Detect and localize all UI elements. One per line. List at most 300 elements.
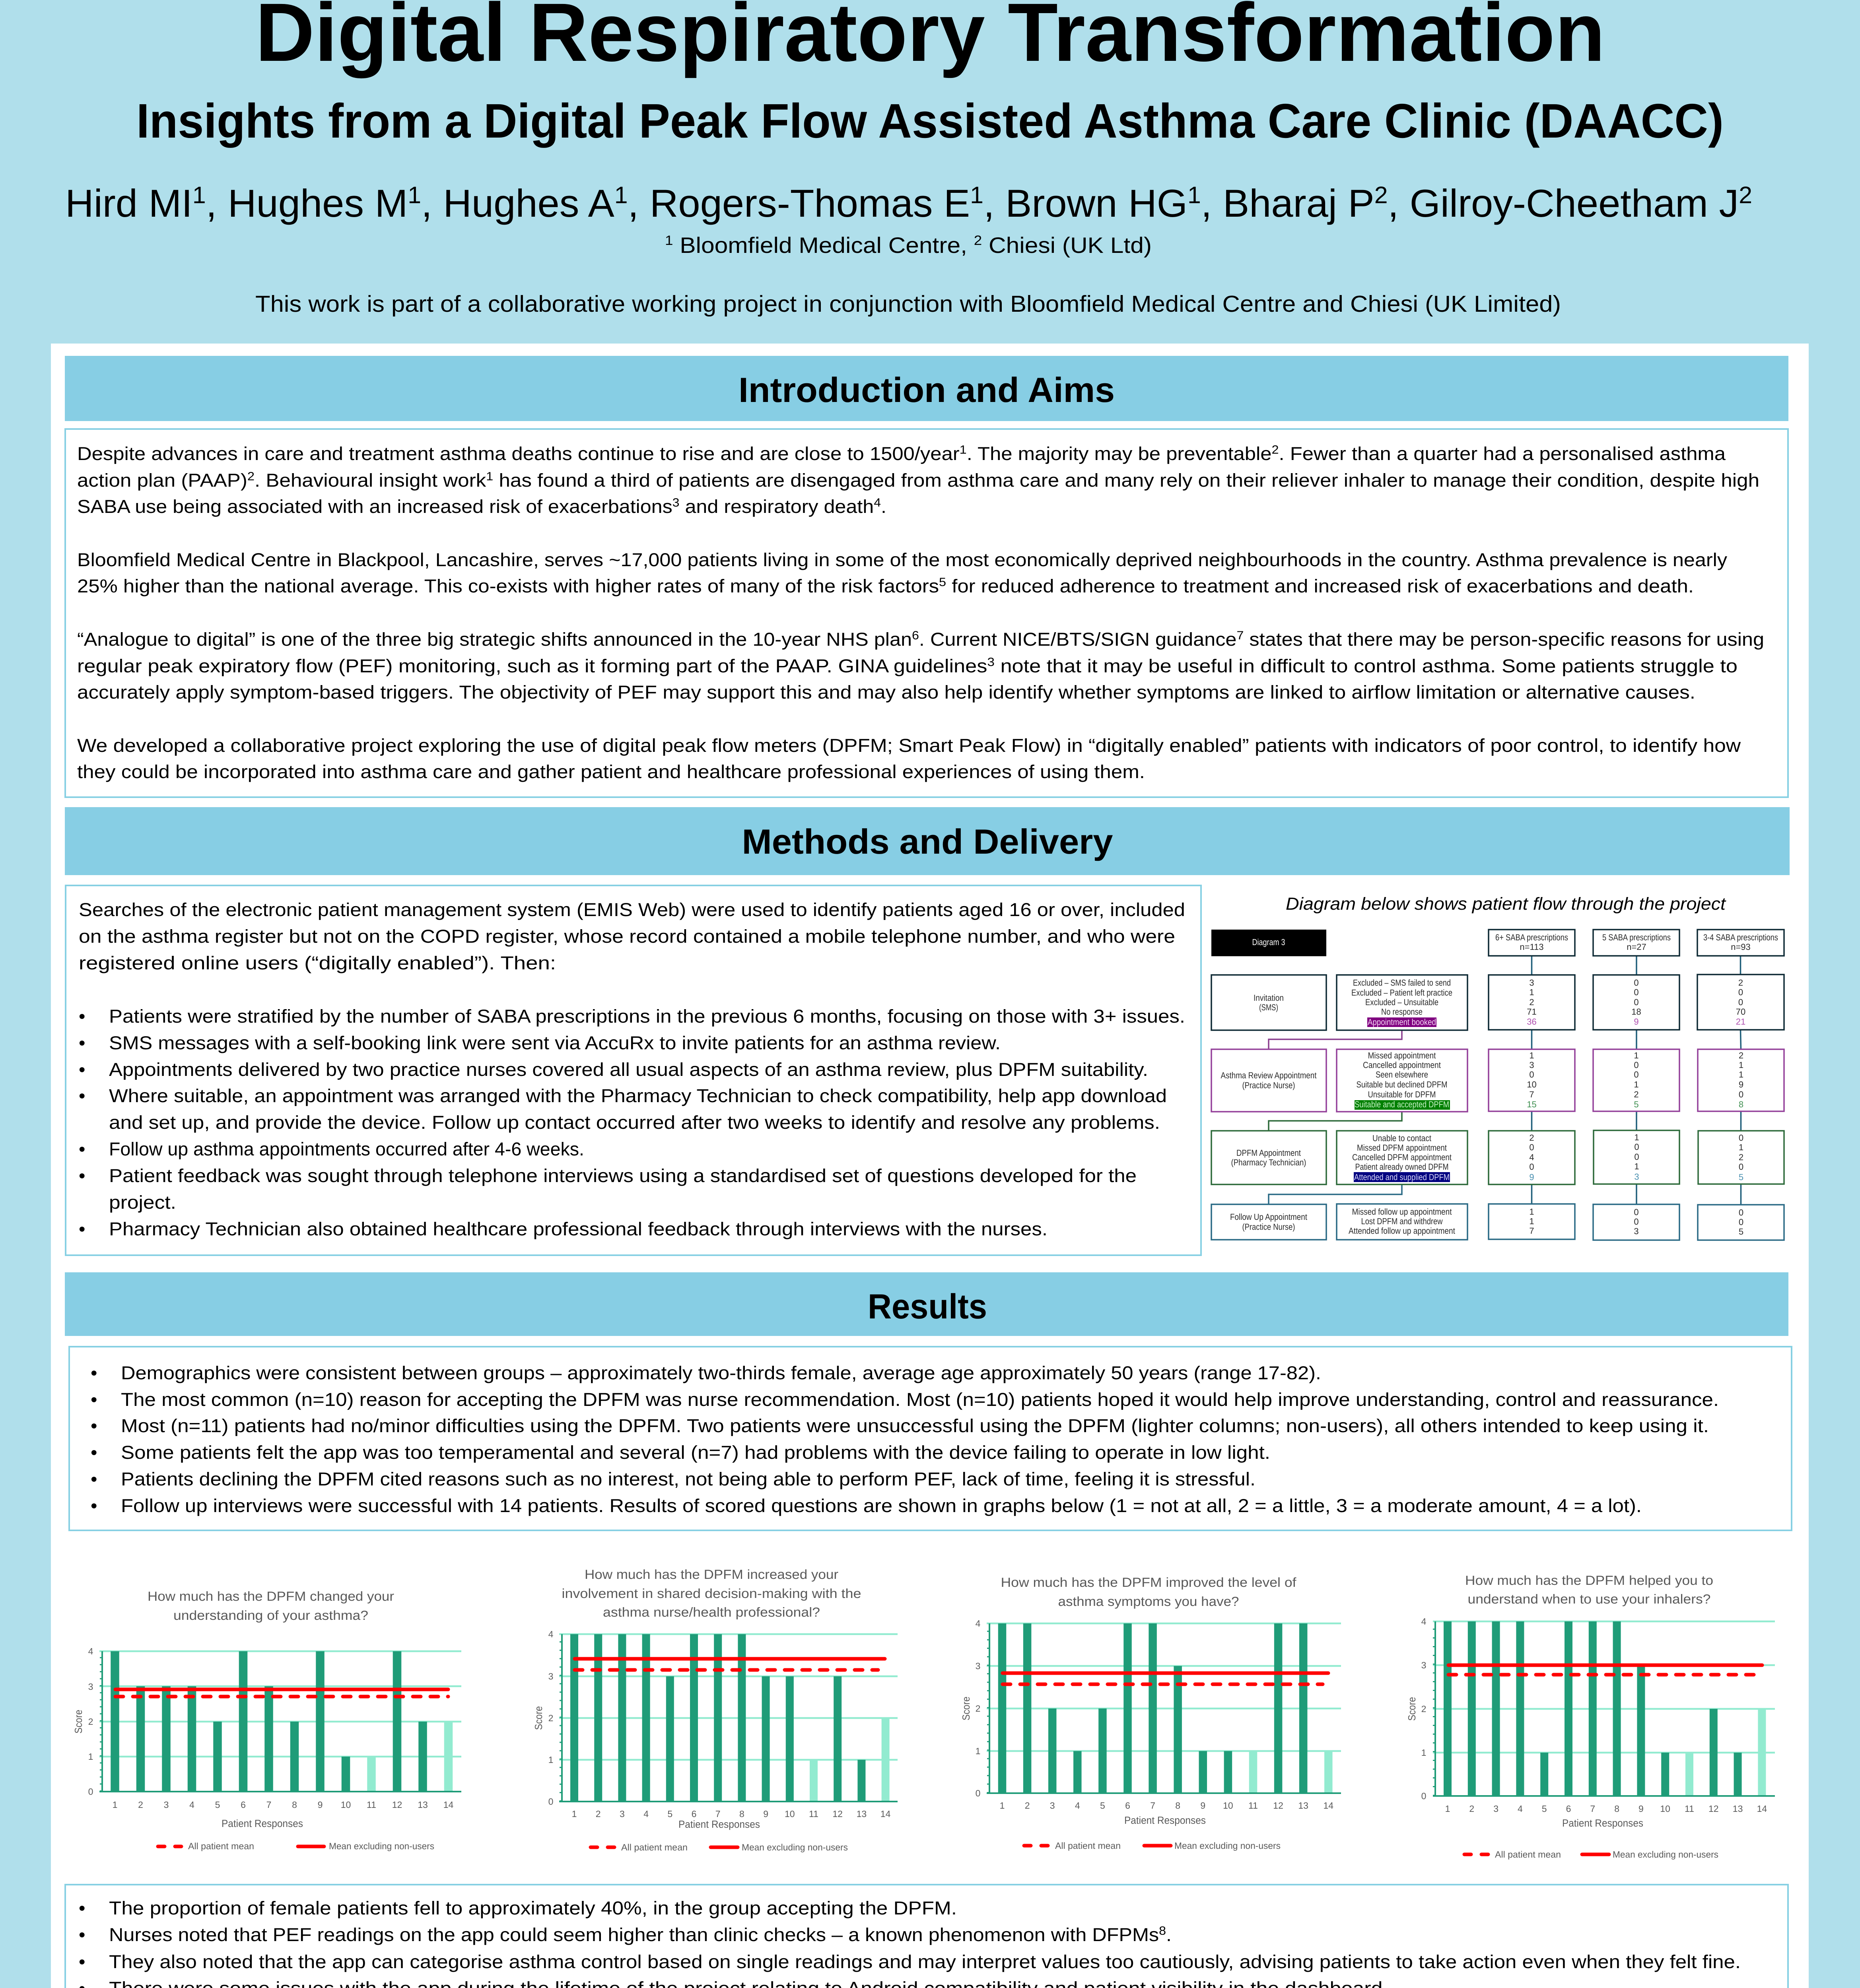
chart 2 axis labels: 3: [548, 1671, 553, 1681]
text box: methods: Pharmacy Technician also obtained healthcare professional feedback through interviews with the nurses.: [109, 1218, 1048, 1239]
text box: introduction: 25% higher than the national average. This co-exists with higher rates of many of the risk factors: [77, 575, 874, 596]
chart 1 axis labels: 14: [443, 1800, 453, 1810]
chart 4 axis labels: 14: [1757, 1804, 1767, 1814]
numbers: 6+ SABA column: 9: [1529, 1172, 1534, 1182]
numbers: 3-4 SABA column: 0: [1739, 1217, 1743, 1227]
panel: results: [65, 1272, 1792, 1988]
diagram label box: [1211, 930, 1326, 956]
text box: results: [69, 1347, 1792, 1530]
numbers: 5 SABA column: 1: [1634, 1161, 1639, 1171]
outcome labels: Appointment booked: [1368, 1017, 1436, 1027]
text box: methods: SMS messages with a self-booking link were sent via AccuRx to invite patients for an asthma review.: [109, 1032, 1001, 1053]
chart 3 axis labels: 9: [1200, 1800, 1205, 1811]
chart 1 axis labels: 7: [266, 1800, 271, 1810]
numbers: 5 SABA column: 0: [1634, 1060, 1639, 1070]
text box: methods: Patient feedback was sought through telephone interviews using a standardised set of questions developed for the: [109, 1165, 1137, 1186]
numbers: 6+ SABA column: [1527, 978, 1537, 1236]
text box: methods: Searches of the electronic patient management system (EMIS Web) were used to identify patients aged 16 or over, included: [79, 899, 1185, 920]
chart 1 bars: [115, 1651, 449, 1792]
affiliations: 2: [974, 233, 982, 248]
authors: , Brown HG: [983, 181, 1188, 225]
chart 1 legend: Mean excluding non-users: [329, 1841, 434, 1851]
numbers: 3-4 SABA column: 2: [1739, 1050, 1743, 1060]
outcome labels: Suitable and accepted DPFM: [1355, 1099, 1449, 1109]
chart 3 legend: All patient mean: [1055, 1840, 1121, 1851]
numbers: 5 SABA column: 0: [1634, 1207, 1639, 1217]
chart 3 axis labels: Patient Responses: [1124, 1814, 1206, 1826]
chart 4 axis labels: 7: [1590, 1804, 1595, 1814]
affiliations: Bloomfield Medical Centre,: [673, 233, 974, 258]
chart 3 legend: Mean excluding non-users: [1174, 1840, 1281, 1851]
chart 3 axis labels: 8: [1175, 1800, 1180, 1811]
chart 2 axis labels: 6: [692, 1809, 696, 1819]
numbers: 3-4 SABA column: [1736, 978, 1745, 1237]
chart 2 axis labels: Patient Responses: [678, 1818, 760, 1830]
text box: introduction: accurately apply symptom-based triggers. The objectivity of PEF may support this and may also help identify whether symptoms are linked to airflow limitation or alternative causes.: [77, 681, 1695, 703]
chart 2 axis labels: 9: [763, 1809, 768, 1819]
chart 2 axis labels: 12: [832, 1809, 843, 1819]
numbers: 3-4 SABA column: 70: [1736, 1007, 1745, 1017]
chart 4 mean lines: [1448, 1665, 1762, 1675]
row: follow up: [1211, 1204, 1784, 1240]
chart 2 title: How much has the DPFM increased your: [585, 1567, 838, 1582]
chart 4 axis labels: 8: [1614, 1804, 1619, 1814]
chart 2 axis labels: 5: [667, 1809, 672, 1819]
authors: , Bharaj P: [1201, 181, 1374, 225]
text box: results: Patients declining the DPFM cited reasons such as no interest, not being able to perform PEF, lack of time, feeling it is stressful.: [121, 1468, 1256, 1489]
heading: introduction: Introduction and Aims: [739, 370, 1115, 410]
chart 2 legend: Mean excluding non-users: [742, 1842, 848, 1852]
outcome labels: Attended follow up appointment: [1349, 1226, 1455, 1236]
chart 2 axis labels: 1: [572, 1809, 577, 1819]
authors: 2: [1739, 182, 1752, 208]
text box: introduction: Despite advances in care and treatment asthma deaths continue to rise and are close to 1500/year: [77, 443, 894, 464]
numbers: 5 SABA column: 9: [1634, 1017, 1639, 1027]
numbers: 3-4 SABA column: 1: [1739, 1060, 1743, 1070]
numbers: 5 SABA column: 18: [1631, 1007, 1641, 1017]
chart 3 axis labels: 14: [1324, 1800, 1333, 1811]
chart 4 title: [1465, 1573, 1713, 1606]
chart 2 axis labels: 13: [857, 1809, 867, 1819]
outcome labels: Suitable but declined DPFM: [1356, 1079, 1448, 1089]
numbers: 5 SABA column: 1: [1634, 1132, 1639, 1142]
heading: methods: Methods and Delivery: [742, 822, 1113, 861]
chart 2 mean lines: [575, 1659, 885, 1670]
chart 3 title: asthma symptoms you have?: [1058, 1594, 1239, 1609]
numbers: 3-4 SABA column: 1: [1739, 1070, 1743, 1079]
outcome labels: Cancelled DPFM appointment: [1352, 1152, 1452, 1162]
chart 4: when to use inhalers: [1406, 1573, 1775, 1860]
column headers text: 5 SABA prescriptions: [1602, 932, 1671, 942]
text box: methods: Patients were stratified by the number of SABA prescriptions in the previous 6 months, focusing on those with 3+ issues.: [109, 1006, 1185, 1027]
outcome labels: Excluded – Patient left practice: [1351, 988, 1452, 998]
text box: methods: •: [79, 1138, 85, 1159]
chart 4 legend: Mean excluding non-users: [1613, 1849, 1718, 1860]
affiliations: 1: [665, 233, 673, 248]
chart 2 axis labels: 4: [548, 1629, 554, 1639]
chart 3 axis labels: 1: [976, 1746, 980, 1756]
subtitle: Insights from a Digital Peak Flow Assisted Asthma Care Clinic (DAACC): [136, 94, 1724, 148]
chart 1 axis labels: Score: [72, 1710, 84, 1734]
chart 4 axis labels: 6: [1566, 1804, 1571, 1814]
chart 1 axis labels: 0: [88, 1786, 93, 1797]
numbers: 6+ SABA column: 0: [1529, 1142, 1534, 1152]
text box: methods: •: [79, 1085, 85, 1106]
text box: results: •: [91, 1362, 97, 1383]
numbers: 6+ SABA column: 3: [1529, 978, 1534, 988]
chart 4 axis labels: 12: [1708, 1804, 1719, 1814]
chart 1 axis labels: [72, 1646, 453, 1829]
numbers: 3-4 SABA column: 8: [1739, 1099, 1743, 1109]
numbers: 3-4 SABA column: 0: [1739, 1208, 1743, 1217]
heading: introduction: [65, 356, 1788, 421]
chart 1 title: understanding of your asthma?: [173, 1608, 368, 1623]
numbers: 6+ SABA column: 7: [1529, 1226, 1534, 1236]
chart 4 axis labels: 5: [1542, 1804, 1547, 1814]
column headers text: [1495, 932, 1778, 952]
chart 4 axis labels: 9: [1638, 1804, 1644, 1814]
text box: introduction: 1: [486, 470, 493, 483]
chart 2 axis labels: 1: [548, 1755, 553, 1765]
chart 2 axis labels: 10: [785, 1809, 795, 1819]
text box: result notes: Nurses noted that PEF readings on the app could seem higher than clinic checks – a known phenomenon with DFPMs: [109, 1924, 1089, 1945]
chart 4 axis labels: Score: [1406, 1697, 1418, 1721]
text box: methods: on the asthma register but not on the COPD register, whose record contained a mobile telephone number, and who were: [79, 926, 1175, 947]
stage labels: (Practice Nurse): [1242, 1222, 1295, 1232]
numbers: 5 SABA column: 0: [1634, 1152, 1639, 1162]
text box: results: Some patients felt the app was too temperamental and several (n=7) had problems with the device failing to operate in low light.: [121, 1442, 1270, 1463]
stage labels: (Pharmacy Technician): [1231, 1157, 1306, 1167]
text box: methods: Where suitable, an appointment was arranged with the Pharmacy Technician to check compatibility, help app download: [109, 1085, 1167, 1106]
text box: introduction: for reduced adherence to treatment and increased risk of exacerbations and death.: [946, 575, 1694, 596]
text box: introduction: [65, 429, 1788, 797]
numbers: 5 SABA column: 3: [1634, 1226, 1639, 1236]
chart 4 legend: All patient mean: [1495, 1849, 1561, 1860]
chart 3 bars: [1002, 1623, 1328, 1793]
numbers: 3-4 SABA column: 0: [1738, 997, 1743, 1007]
stage labels: Follow Up Appointment: [1230, 1212, 1307, 1222]
text box: methods: •: [79, 1059, 85, 1080]
chart 3 axis labels: 4: [1075, 1800, 1080, 1811]
numbers: 5 SABA column: 0: [1634, 1070, 1639, 1079]
text box: methods: Appointments delivered by two practice nurses covered all usual aspects of an asthma review, plus DPFM suitability.: [109, 1059, 1148, 1080]
chart 3 axis labels: 5: [1100, 1800, 1105, 1811]
row: invitation: [1211, 975, 1784, 1030]
text box: results: Most (n=11) patients had no/minor difficulties using the DPFM. Two patients were unsuccessful using the DPFM (lighter columns; non-users), all others intended to keep using it.: [121, 1415, 1709, 1436]
numbers: 3-4 SABA column: 2: [1738, 978, 1743, 988]
chart 1 axis labels: 5: [215, 1800, 220, 1810]
stage labels: (Practice Nurse): [1242, 1080, 1295, 1090]
chart 1 axis labels: 8: [292, 1800, 297, 1810]
text box: introduction: 2: [247, 470, 255, 483]
text box: introduction: 6: [912, 629, 919, 642]
text box: introduction: 3: [987, 656, 995, 669]
chart 3: asthma symptoms: [960, 1575, 1341, 1851]
text box: introduction: has found a third of patients are disengaged from asthma care and many rely on their reliever inhaler to manage their condition, despite high: [493, 470, 1759, 491]
chart 3 axis labels: 11: [1248, 1800, 1258, 1811]
outcome labels: Cancelled appointment: [1363, 1060, 1441, 1070]
chart 3 axis labels: 3: [976, 1661, 980, 1671]
numbers: 6+ SABA column: 0: [1529, 1162, 1534, 1172]
chart 4 axis labels: 1: [1421, 1747, 1426, 1758]
text box: introduction: . Behavioural insight work: [255, 470, 486, 491]
column headers text: n=93: [1731, 942, 1751, 952]
chart 2 axis labels: [533, 1629, 891, 1830]
collaborative statement: This work is part of a collaborative working project in conjunction with Bloomfield Medical Centre and Chiesi (UK Limited): [255, 291, 1561, 317]
text box: introduction: 4: [874, 496, 881, 509]
authors: , Rogers-Thomas E: [628, 181, 970, 225]
outcome labels: Missed appointment: [1368, 1050, 1436, 1060]
chart 4 axis labels: 3: [1493, 1804, 1498, 1814]
chart 2 axis labels: 0: [548, 1796, 553, 1807]
authors: 1: [1188, 182, 1201, 208]
diagram caption: Diagram below shows patient flow through the project: [1286, 894, 1726, 914]
chart 4 axis labels: 3: [1421, 1660, 1426, 1670]
chart 3 axis labels: 2: [976, 1703, 980, 1714]
text box: introduction: they could be incorporated into asthma care and gather patient and healthcare professional experiences of using them.: [77, 761, 1145, 782]
chart 1: understanding of asthma: [72, 1589, 461, 1851]
numbers: 6+ SABA column: 36: [1527, 1017, 1537, 1027]
row: asthma review: [1211, 1049, 1784, 1112]
column headers text: n=113: [1520, 942, 1544, 952]
chart 2 title: involvement in shared decision-making with the: [562, 1586, 861, 1601]
chart 2: shared decision-making: [533, 1567, 898, 1852]
chart 1 axis labels: 4: [189, 1800, 194, 1810]
text box: result notes: .: [1166, 1924, 1172, 1945]
text box: methods: registered online users (“digitally enabled”). Then:: [79, 952, 556, 973]
chart 2 axis labels: 4: [643, 1809, 649, 1819]
numbers: 3-4 SABA column: 5: [1739, 1227, 1743, 1237]
outcome labels: Missed follow up appointment: [1352, 1207, 1452, 1217]
heading: results: Results: [868, 1287, 987, 1326]
panel: methods and delivery: [65, 807, 1790, 1255]
chart 2 axis labels: 8: [739, 1809, 744, 1819]
chart 1 axis labels: Patient Responses: [222, 1817, 303, 1829]
text box: introduction: and respiratory death: [680, 496, 874, 517]
chart 2 axis labels: 14: [880, 1809, 891, 1819]
numbers: 5 SABA column: 2: [1634, 1089, 1639, 1099]
outcome labels: Lost DPFM and withdrew: [1361, 1216, 1443, 1226]
numbers: 5 SABA column: 3: [1634, 1172, 1639, 1182]
text box: result notes: The proportion of female patients fell to approximately 40%, in the group accepting the DPFM.: [109, 1897, 957, 1918]
text box: introduction: . The majority may be preventable: [967, 443, 1272, 464]
text box: introduction: SABA use being associated with an increased risk of exacerbations: [77, 496, 634, 517]
numbers: 5 SABA column: 0: [1634, 1217, 1639, 1227]
text box: introduction: regular peak expiratory flow (PEF) monitoring, such as it forming part of the PAAP. GINA guidelines: [77, 655, 895, 676]
authors: , Gilroy-Cheetham J: [1388, 181, 1739, 225]
chart 1 title: How much has the DPFM changed your: [148, 1589, 394, 1604]
text box: methods: •: [79, 1032, 85, 1053]
text box: introduction: states that there may be person-specific reasons for using: [1244, 629, 1764, 650]
text box: results: •: [91, 1442, 97, 1463]
numbers: 5 SABA column: 0: [1634, 978, 1639, 988]
numbers: 6+ SABA column: 71: [1527, 1007, 1537, 1017]
text box: introduction: 2: [1272, 443, 1279, 456]
chart 4 axis labels: 2: [1421, 1704, 1426, 1714]
numbers: 5 SABA column: 5: [1634, 1099, 1639, 1109]
chart 1 axis labels: 1: [113, 1800, 117, 1810]
affiliations: Chiesi (UK Ltd): [982, 233, 1152, 258]
numbers: 3-4 SABA column: 0: [1739, 1089, 1743, 1099]
chart 3 axis labels: 4: [976, 1618, 981, 1629]
numbers: 5 SABA column: 1: [1634, 1079, 1639, 1089]
chart 2 axis labels: 7: [715, 1809, 721, 1819]
chart 1 axis labels: 1: [88, 1751, 93, 1762]
numbers: 6+ SABA column: 1: [1529, 1050, 1534, 1060]
heading: results: [65, 1272, 1788, 1336]
column headers text: n=27: [1627, 942, 1646, 952]
numbers: 6+ SABA column: 7: [1529, 1089, 1534, 1099]
chart 2 legend: All patient mean: [621, 1842, 688, 1852]
chart 2 legend: [591, 1842, 848, 1852]
text box: introduction: . Fewer than a quarter had a personalised asthma: [1279, 443, 1726, 464]
outcome labels: Patient already owned DPFM: [1355, 1162, 1448, 1172]
text box: methods: Follow up asthma appointments occurred after 4-6 weeks.: [109, 1138, 584, 1159]
text box: introduction: 5: [939, 576, 946, 589]
chart 3 axis labels: 6: [1125, 1800, 1130, 1811]
text box: results: •: [91, 1415, 97, 1436]
outcome labels: Unable to contact: [1372, 1133, 1431, 1143]
numbers: 6+ SABA column: 0: [1529, 1070, 1534, 1079]
chart 1 legend: All patient mean: [188, 1841, 254, 1851]
chart 4 axis labels: 1: [1445, 1804, 1450, 1814]
authors: 1: [970, 182, 983, 208]
chart 3 legend: [1024, 1840, 1281, 1851]
chart 3 mean lines: [1003, 1673, 1328, 1684]
text box: introduction: We developed a collaborative project exploring the use of digital peak flow meters (DPFM; Smart Peak Flow) in “digitally enabled” patients with indicators of poor control, to identify how: [77, 735, 1741, 756]
chart 1 axis labels: 13: [418, 1800, 428, 1810]
text box: results: •: [91, 1389, 97, 1410]
text box: result notes: •: [79, 1924, 85, 1945]
chart 4 axis labels: Patient Responses: [1562, 1817, 1643, 1829]
chart 1 axis labels: 3: [88, 1681, 93, 1692]
numbers: 6+ SABA column: 4: [1529, 1152, 1534, 1162]
chart 3 axis labels: 0: [976, 1788, 980, 1798]
chart 3 axis labels: 7: [1150, 1800, 1155, 1811]
numbers: 3-4 SABA column: 5: [1739, 1172, 1743, 1182]
chart 4 axis labels: 2: [1469, 1804, 1474, 1814]
text box: introduction: 7: [1236, 629, 1244, 642]
highlights: [1354, 1017, 1450, 1182]
numbers: 6+ SABA column: 1: [1529, 1216, 1534, 1226]
stage labels: Asthma Review Appointment: [1221, 1070, 1316, 1080]
numbers: 6+ SABA column: 1: [1529, 987, 1534, 997]
outcome labels: Missed DPFM appointment: [1357, 1143, 1447, 1153]
chart 2 axis labels: 3: [620, 1809, 625, 1819]
stage labels: (SMS): [1259, 1002, 1278, 1012]
text box: methods: •: [79, 1006, 85, 1027]
text box: results: •: [91, 1468, 97, 1489]
chart 4 legend: [1464, 1849, 1718, 1860]
chart 3 axis labels: Score: [960, 1697, 972, 1720]
text box: result notes: [65, 1885, 1788, 1988]
chart 3 axis labels: 2: [1025, 1800, 1030, 1811]
diagram label box: Diagram 3: [1252, 937, 1285, 947]
chart 1 legend: [158, 1841, 434, 1851]
chart 2 bars: [574, 1634, 886, 1802]
chart 3 axis labels: 12: [1273, 1800, 1283, 1811]
numbers: 3-4 SABA column: 0: [1739, 1162, 1743, 1172]
numbers: 3-4 SABA column: 2: [1739, 1152, 1743, 1162]
text box: results: Demographics were consistent between groups – approximately two-thirds female, average age approximately 50 years (range 17-82).: [121, 1362, 1321, 1383]
chart 1 axis labels: 11: [367, 1800, 376, 1810]
chart 3 axis labels: 1: [1000, 1800, 1005, 1811]
outcome labels: No response: [1381, 1007, 1423, 1017]
chart 4 axis labels: 11: [1685, 1804, 1694, 1814]
authors: , Hughes M: [206, 181, 408, 225]
column headers text: 6+ SABA prescriptions: [1495, 932, 1568, 942]
chart 3 title: How much has the DPFM improved the level of: [1001, 1575, 1296, 1590]
text box: introduction: .: [881, 496, 886, 517]
chart 4 axis labels: 4: [1518, 1804, 1523, 1814]
numbers: 3-4 SABA column: 0: [1738, 987, 1743, 997]
chart 2 axis labels: 2: [596, 1809, 601, 1819]
outcome labels: Excluded – Unsuitable: [1365, 997, 1438, 1007]
column headers text: 3-4 SABA prescriptions: [1703, 932, 1778, 942]
chart 1 axis labels: 12: [392, 1800, 402, 1810]
numbers: 5 SABA column: [1631, 978, 1641, 1236]
chart 4 axis labels: [1406, 1616, 1767, 1829]
outcome labels: Seen elsewhere: [1376, 1070, 1428, 1079]
panel: introduction and aims: [65, 356, 1788, 797]
text box: introduction: “Analogue to digital” is one of the three big strategic shifts announced in the 10-year NHS plan: [77, 629, 855, 650]
text box: results: The most common (n=10) reason for accepting the DPFM was nurse recommendation. Most (n=10) patients hoped it would help improve understanding, control and reassurance.: [121, 1389, 1719, 1410]
stage labels: Invitation: [1254, 993, 1284, 1003]
numbers: 5 SABA column: 0: [1634, 997, 1639, 1007]
numbers: 3-4 SABA column: 21: [1736, 1017, 1745, 1027]
numbers: 6+ SABA column: 3: [1529, 1060, 1534, 1070]
chart 2 axis labels: 11: [809, 1809, 818, 1819]
chart 3 axis labels: 3: [1050, 1800, 1055, 1811]
text box: introduction: Bloomfield Medical Centre in Blackpool, Lancashire, serves ~17,000 patients living in some of the most economically deprived neighbourhoods in the country. Asthma prevalence is nearly: [77, 549, 1728, 570]
chart 1 axis labels: 6: [241, 1800, 246, 1810]
chart 1 axis labels: 4: [88, 1646, 93, 1656]
chart 1 mean lines: [115, 1689, 448, 1697]
authors: 1: [614, 182, 628, 208]
numbers: 5 SABA column: 0: [1634, 1142, 1639, 1152]
text box: methods: [66, 885, 1201, 1255]
outcome labels: Attended and supplied DPFM: [1354, 1172, 1450, 1182]
chart 1 axis labels: 3: [164, 1800, 169, 1810]
text box: introduction: action plan (PAAP): [77, 470, 234, 491]
chart 4 bars: [1448, 1621, 1762, 1796]
text box: results: •: [91, 1495, 97, 1516]
heading: methods: [65, 807, 1790, 875]
stage labels: DPFM Appointment: [1236, 1148, 1301, 1158]
text box: result notes: •: [79, 1951, 85, 1972]
authors: 2: [1374, 182, 1388, 208]
numbers: 6+ SABA column: 15: [1527, 1099, 1537, 1109]
chart 3 axis labels: [960, 1618, 1333, 1826]
numbers: 3-4 SABA column: 9: [1739, 1079, 1743, 1089]
row: DPFM appointment: [1211, 1130, 1784, 1184]
boxes: SABA groups: [1489, 930, 1784, 956]
numbers: 6+ SABA column: 2: [1529, 1133, 1534, 1143]
chart 4 axis labels: 0: [1421, 1791, 1426, 1801]
numbers: 5 SABA column: 0: [1634, 987, 1639, 997]
chart 2 axis labels: 2: [548, 1713, 553, 1723]
chart 4 axis labels: 13: [1733, 1804, 1743, 1814]
chart 2 title: [562, 1567, 861, 1619]
outcome labels: Excluded – SMS failed to send: [1353, 978, 1451, 988]
text box: result notes: 8: [1159, 1924, 1166, 1938]
text box: methods: •: [79, 1218, 85, 1239]
numbers: 3-4 SABA column: 0: [1739, 1133, 1743, 1143]
chart 3 axis labels: 10: [1223, 1800, 1233, 1811]
chart 1 axis labels: 10: [341, 1800, 351, 1810]
chart 2 title: asthma nurse/health professional?: [603, 1605, 820, 1619]
chart 4 title: understand when to use your inhalers?: [1467, 1592, 1711, 1606]
